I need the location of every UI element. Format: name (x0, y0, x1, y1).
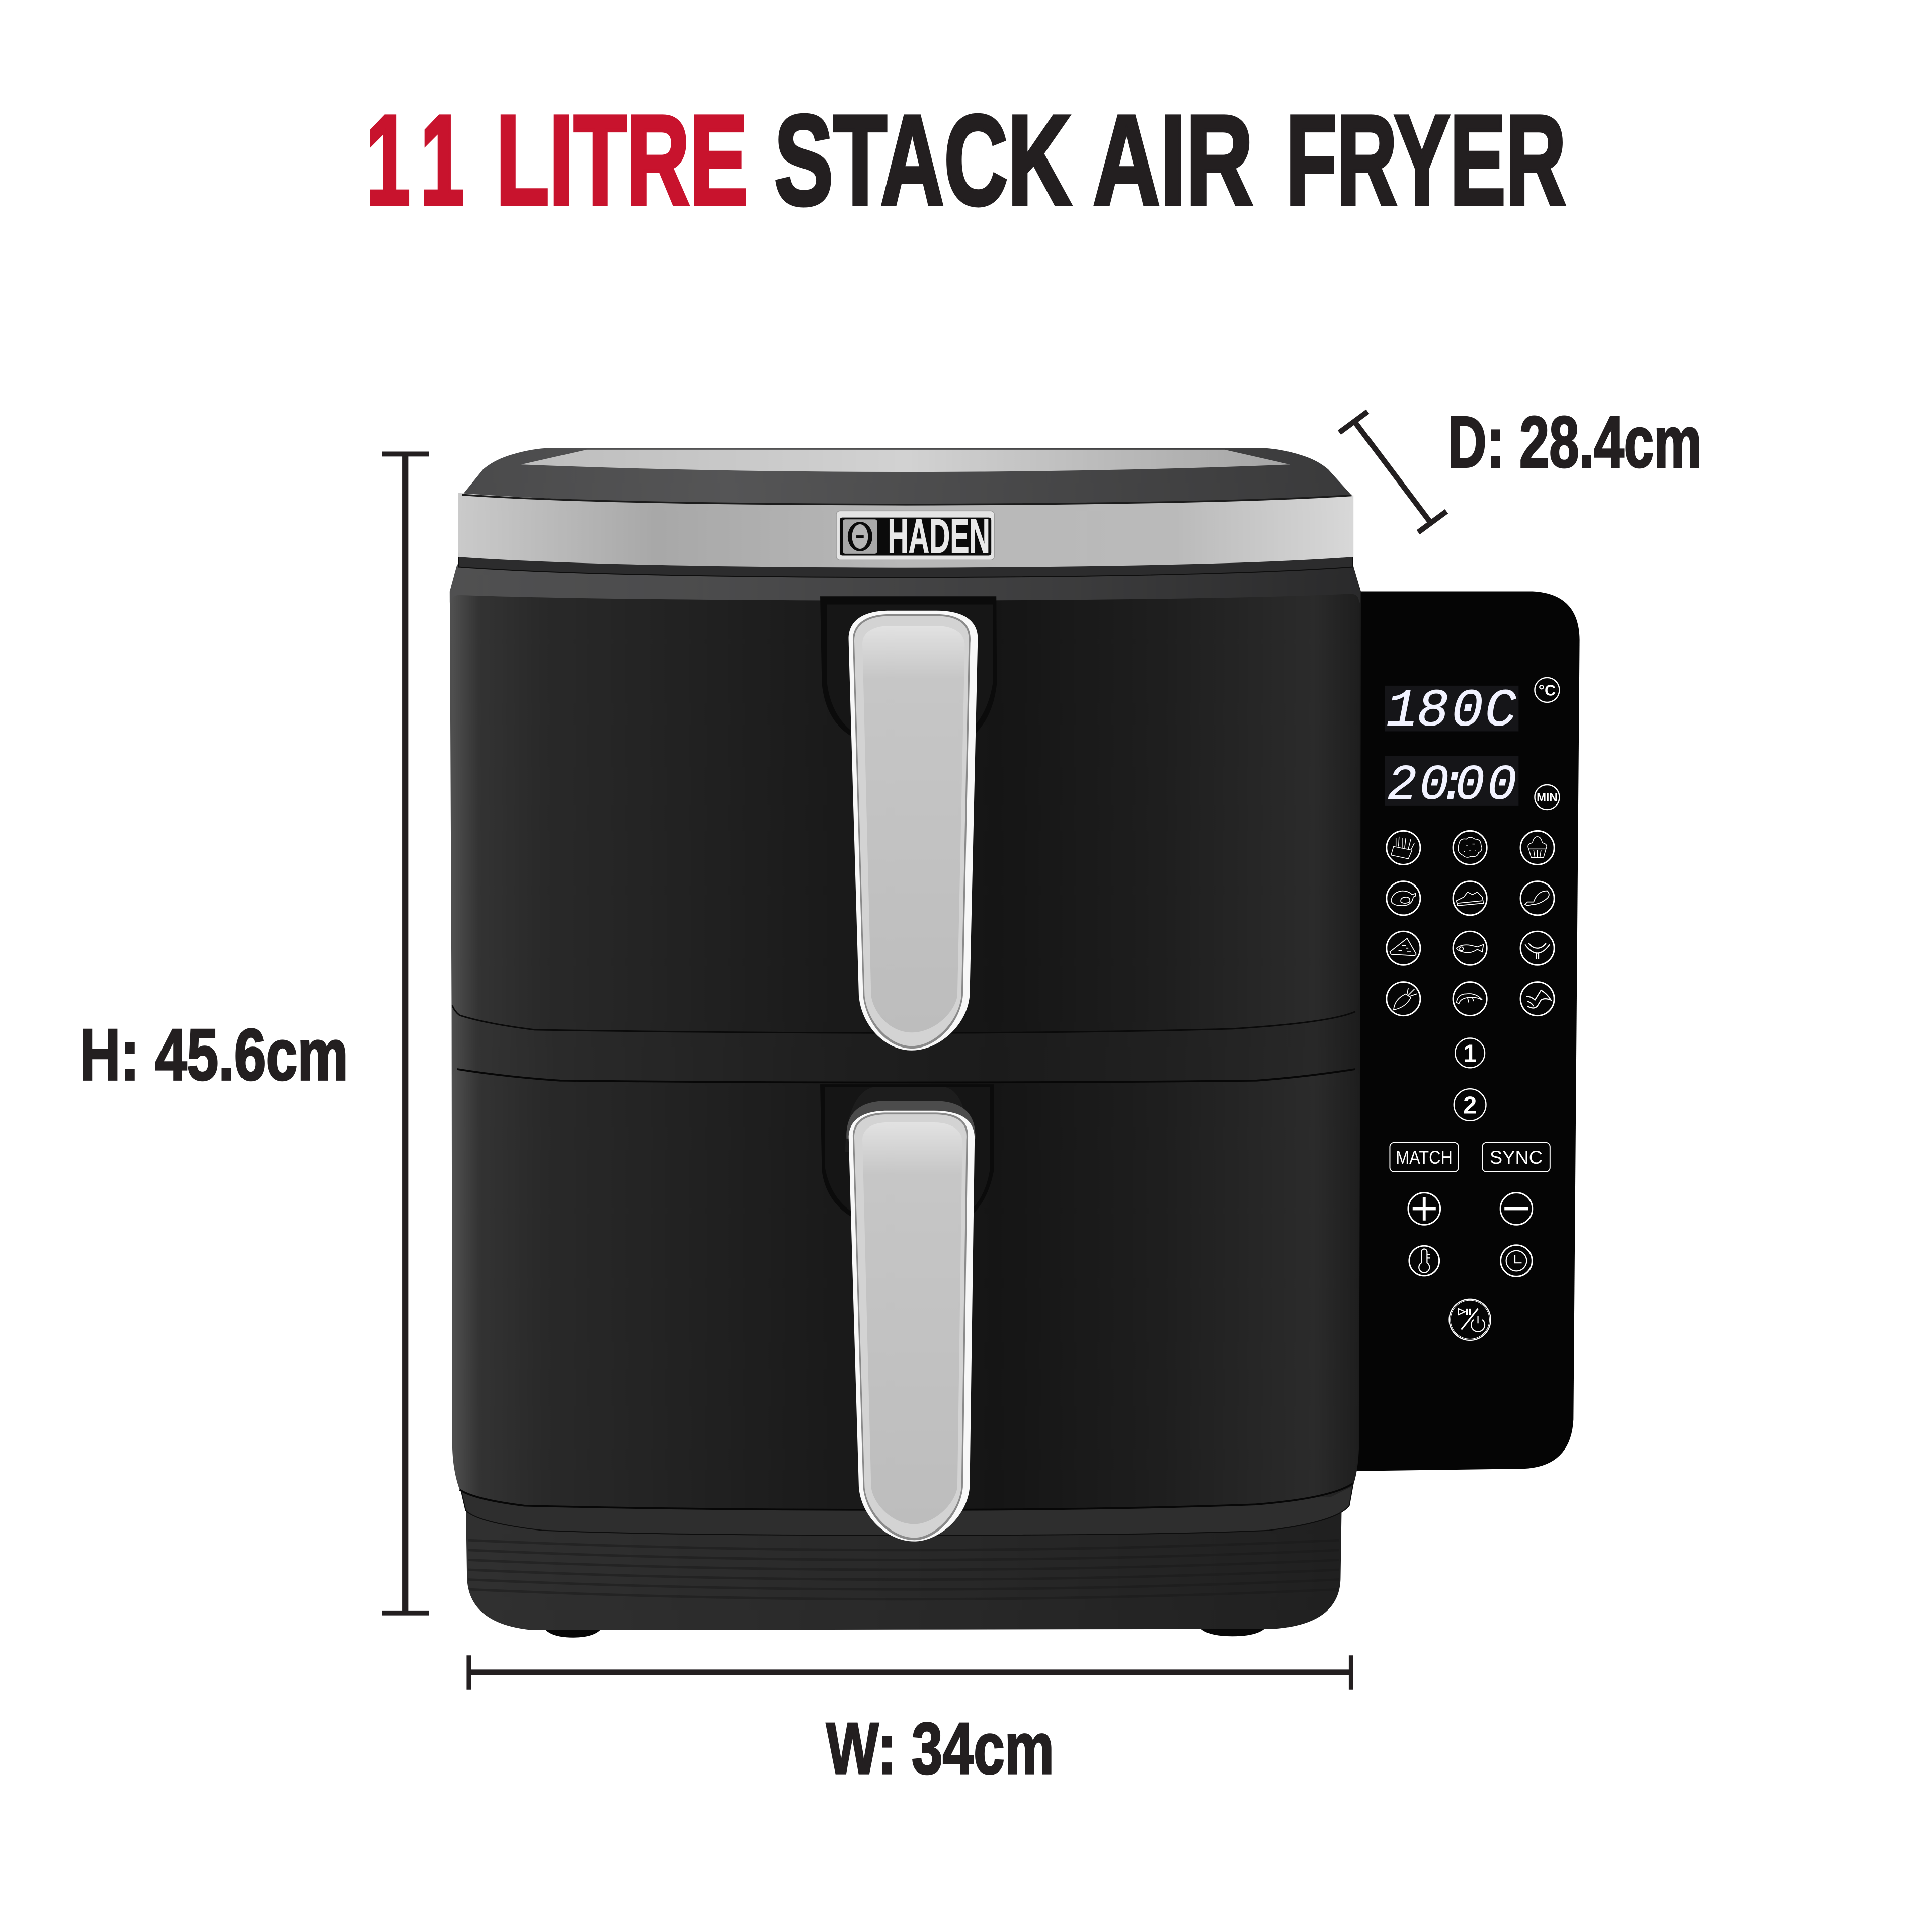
icon: sausage (1520, 931, 1554, 965)
basket 1 button (1455, 1038, 1485, 1068)
depth dimension line (1339, 412, 1446, 532)
title: word air: AIR (1093, 88, 1253, 231)
minutes button (1535, 785, 1559, 810)
brand badge: HADEN (888, 510, 990, 563)
upper ring (450, 565, 1360, 603)
celsius button (1535, 678, 1559, 702)
basket 2 button (1454, 1089, 1486, 1121)
lower handle dark lip (846, 1101, 976, 1139)
match button (1390, 1143, 1459, 1172)
icon: steak (1453, 881, 1487, 915)
title (366, 88, 1566, 231)
upper drawer recess (820, 596, 997, 736)
preset food buttons (1387, 831, 1554, 1016)
icon: prawn (1453, 982, 1487, 1016)
air fryer body (450, 448, 1361, 1638)
height dimension line (382, 453, 429, 1613)
icon: fish (1453, 931, 1487, 965)
panel: control panel (1343, 592, 1580, 1471)
lower drawer seams (457, 1069, 1355, 1510)
title: red unit: LITRE (496, 88, 748, 231)
icon: carrot (1387, 982, 1420, 1016)
icon: chicken (1387, 881, 1420, 915)
thermometer button (1409, 1246, 1439, 1276)
upper handle (849, 611, 978, 1051)
logo mark (843, 519, 877, 554)
basket 2 button: 2 (1463, 1092, 1477, 1119)
title: word fryer: FRYER (1286, 88, 1566, 231)
minus button (1500, 1193, 1533, 1225)
lower handle lobe (845, 1087, 970, 1152)
title: word stack: STACK (774, 88, 1071, 231)
minutes button: MIN (1537, 791, 1558, 804)
match button: MATCH (1396, 1147, 1453, 1168)
width dimension line (468, 1655, 1352, 1690)
body silhouette (450, 565, 1361, 1497)
lower handle (846, 1101, 976, 1542)
lower drawer (452, 1069, 1359, 1510)
lid (462, 448, 1352, 504)
width label: W: 34cm (826, 1708, 1054, 1789)
lid seam (462, 495, 1352, 505)
brushed steel band (458, 493, 1353, 568)
plus button (1408, 1193, 1440, 1225)
depth label: D: 28.4cm (1448, 401, 1702, 482)
upper drawer (452, 594, 1359, 1033)
panel background (1343, 592, 1580, 1471)
basket 1 button: 1 (1463, 1040, 1477, 1068)
upper drawer seam (452, 1005, 1355, 1033)
top panel (521, 450, 1290, 472)
icon: fries (1387, 831, 1420, 864)
height label: H: 45.6cm (79, 1014, 348, 1095)
feet (541, 1622, 1269, 1638)
icon: cookie (1453, 831, 1487, 864)
celsius button: °C (1539, 682, 1556, 699)
icon: drumstick (1520, 881, 1554, 915)
ridged base (466, 1497, 1342, 1630)
sync button: SYNC (1490, 1147, 1543, 1168)
timer display: 20:00 (1388, 758, 1517, 814)
lower drawer recess (820, 1084, 994, 1216)
temperature display: 180C (1386, 681, 1516, 741)
icon: cupcake (1520, 831, 1554, 864)
brand badge (836, 510, 994, 563)
lower dark seam ring (458, 553, 1353, 577)
icon: chicken wings (1520, 982, 1554, 1016)
lower trim band (458, 1479, 1354, 1535)
title: red capacity number: 11 (366, 89, 464, 231)
icon: pizza (1387, 931, 1420, 965)
start stop power button (1449, 1299, 1491, 1340)
timer button (1501, 1245, 1532, 1276)
sync button (1482, 1143, 1550, 1172)
